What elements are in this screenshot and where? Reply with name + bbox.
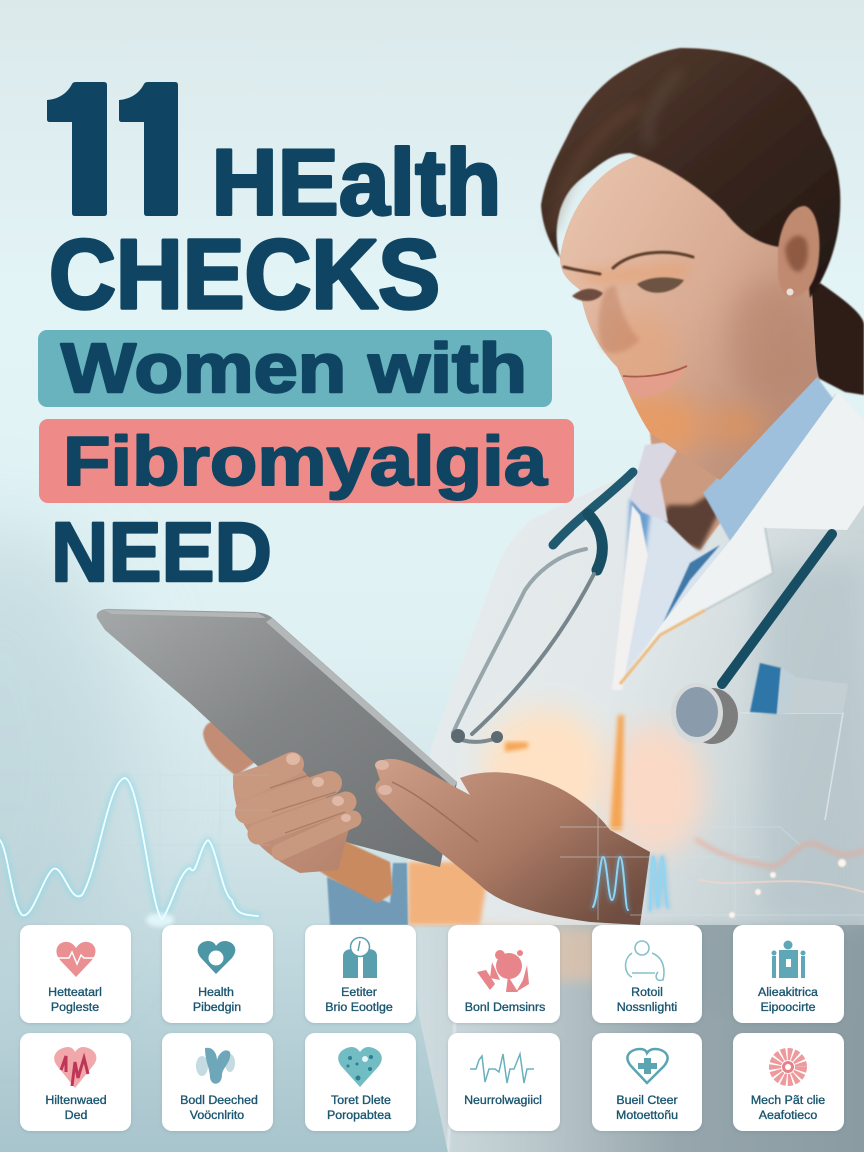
earring [786,288,794,296]
pocket flap [775,677,848,713]
heartbeat line: left [0,778,258,927]
banner: Women with: Women with [61,329,527,407]
eye left [572,289,603,301]
wrist [315,838,393,903]
icon: building [772,940,806,978]
icon: heart with streaks [54,1047,96,1088]
shirt blue fold [663,545,720,623]
icon: heart with circle [198,941,235,974]
card 7: Hiltenwaed [45,1093,107,1107]
eyebrows [564,252,693,274]
left lapel edge [612,505,648,690]
card 3 [305,925,416,1023]
white lab coat [408,392,864,1152]
title: 11 [47,82,178,216]
finger gap [392,782,478,842]
icon: ecg line [470,1054,534,1083]
lapel edge shadow [705,528,773,610]
ponytail [805,283,864,395]
card 7: Ded [65,1108,87,1122]
card 3: Eetiter [341,985,377,999]
hand back [375,759,650,925]
card 9: Toret Dlete [331,1093,391,1107]
card 9: Poropabtea [327,1108,391,1122]
card grid [20,925,844,1131]
shirt blue strip [617,498,650,682]
tablet [97,609,457,867]
shirt placket [617,500,736,682]
fingers [245,764,353,852]
card 11: Bueil Cteer [616,1093,678,1107]
hair highlight [552,105,640,230]
coat shading and glow [400,560,864,1152]
card 3: Brio Eootlge [325,1000,393,1014]
card 8: Bodl Deeched [180,1093,258,1107]
title: 11: 1 [34,46,135,251]
data grid overlay [0,770,864,920]
banner: Fibromyalgia: Fibromyalgia [63,422,548,500]
card 7 [20,1033,131,1131]
title: HEalth: HEalth [212,130,502,234]
icon: dotted heart [338,1047,382,1087]
card 10: Neurrolwagiicl [464,1093,542,1107]
card 10 [448,1033,560,1131]
card 12 [733,1033,844,1131]
card 11 [592,1033,702,1131]
icon: anatomy [477,950,529,992]
card 2: Health [198,985,234,999]
card 5: Rotoil [631,985,663,999]
icon: figures with clock [343,938,377,978]
blue collar [703,377,839,541]
icon: heart with pulse [56,942,96,977]
card 6: Eipoocirte [760,1000,816,1014]
title: 11: 1 [105,46,207,251]
ear [778,206,819,297]
palm [233,755,350,873]
card 11: Motoettoñu [616,1108,678,1122]
icon: flower [196,1048,235,1084]
card 12: Mech Pãt clie [751,1093,825,1107]
shirt collar left [630,440,683,522]
card 8 [162,1033,273,1131]
card 4 [448,925,560,1023]
lips [623,366,687,398]
card 9 [305,1033,416,1131]
right fingernails [375,760,392,795]
neck [650,370,820,550]
stethoscope tubes [453,472,832,742]
eye right [637,277,684,293]
pocket item light [777,668,795,714]
stethoscope chest piece [671,683,738,744]
pocket [740,713,843,820]
hair parting [648,70,680,145]
pocket items [750,663,781,714]
card 2 [162,925,273,1023]
finger creases [270,772,345,833]
icon: pink flower [775,1054,801,1080]
title: CHECKS: CHECKS [49,219,440,329]
lapel orange edge [620,610,705,684]
card 1: Hetteatarl [48,985,102,999]
card 5 [592,925,702,1023]
left thumb [203,722,258,776]
stethoscope ends [451,729,503,743]
face [560,156,817,480]
card 12: Aeafotieco [759,1108,817,1122]
card 6 [733,925,844,1023]
card 1: Pogleste [51,1000,99,1014]
card 1 [20,925,131,1023]
icon: heart with cross [627,1049,668,1083]
card 8: Voöcnlrito [190,1108,244,1122]
mouth line [623,366,687,377]
card 2: Pibedgin [193,1000,241,1014]
card 5: Nossnlighti [617,1000,677,1014]
inner ear [785,236,808,272]
card 6: Alieakitrica [758,985,818,999]
left hand [233,753,393,903]
neck shadow [655,480,735,550]
right hand [375,759,650,925]
title: NEED: NEED [51,505,272,599]
nose shadow [598,285,640,353]
fingernails [286,753,351,822]
sleeve [327,863,408,925]
icon: person outline [626,941,664,980]
card 4: Bonl Demsinrs [465,1000,545,1014]
illustration: doctor [327,48,864,1152]
heartbeat line: right [593,840,864,918]
hair [541,48,840,298]
right lapel [620,392,864,684]
